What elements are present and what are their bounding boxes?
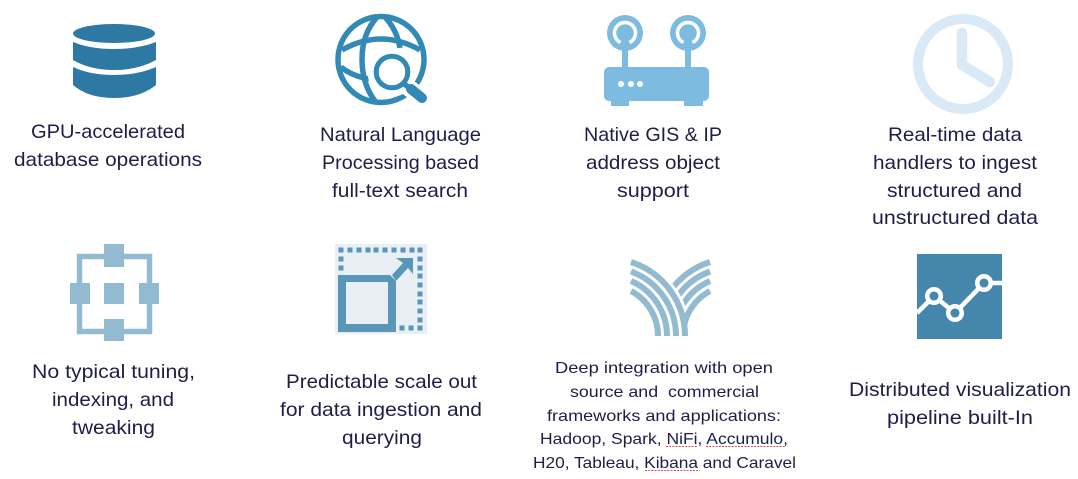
icon: database [73, 24, 156, 98]
text: Natural Language Processing based full-text search: Natural Language [320, 124, 481, 146]
text: Deep integration: Deep integration with open [555, 360, 773, 377]
text: Distributed visualization pipeline built-In [849, 379, 1071, 429]
text: Native GIS & IP address object support: support [617, 180, 690, 202]
panel: scale out [280, 244, 482, 449]
spell-check squiggles [645, 446, 786, 470]
text: Natural Language Processing based full-text search [320, 124, 481, 202]
text: No typical tuning, indexing, and tweaking: tweaking [72, 417, 155, 439]
icon: node network [70, 244, 159, 341]
text: Predictable scale out [280, 371, 482, 449]
text: Deep integration: source and commercial [570, 384, 759, 401]
text: Real-time data handlers: handlers to ingest [873, 152, 1038, 174]
icon: clock [918, 19, 1008, 109]
panel: real-time data [872, 19, 1038, 229]
text: Deep integration: Hadoop, Spark, NiFi, Accumulo, [540, 431, 788, 448]
panel: visualization [849, 254, 1071, 429]
text: Real-time data handlers: Real-time data [888, 124, 1022, 146]
text: Natural Language Processing based full-text search: full-text search [332, 180, 468, 202]
text: Real-time data handlers: unstructured data [872, 207, 1038, 229]
icon: converging arcs [631, 262, 710, 336]
panel: full-text search [320, 16, 481, 202]
text: No typical tuning, indexing, and tweaking: No typical tuning, [32, 361, 195, 383]
text: Predictable scale out: querying [342, 427, 422, 449]
text: Native GIS & IP address object support: Native GIS & IP [584, 124, 722, 146]
icon: scale out square [335, 244, 427, 334]
text: Deep integration: frameworks and applications: [547, 408, 781, 425]
text: Real-time data handlers [872, 124, 1038, 229]
text: Distributed visualization pipeline built-In: Distributed visualization [849, 379, 1071, 401]
text: Distributed visualization pipeline built-In: pipeline built-In [887, 407, 1033, 429]
icon: line chart [917, 254, 1002, 339]
text: GPU-accelerated database operations: database operations [14, 149, 202, 171]
text: Native GIS & IP address object support: address object [586, 152, 721, 174]
icon: router [604, 15, 709, 106]
text: Deep integration [533, 360, 796, 472]
text: Real-time data handlers: structured and [887, 180, 1022, 202]
text: Deep integration: H20, Tableau, Kibana and Caravel [533, 455, 796, 472]
text: No typical tuning, indexing, and tweaking: indexing, and [52, 389, 174, 411]
text: Predictable scale out: Predictable scale out [286, 371, 478, 393]
text: Predictable scale out: for data ingestion and [280, 399, 482, 421]
panel: no tuning [32, 244, 195, 439]
text: Native GIS & IP address object support [584, 124, 722, 202]
text: GPU-accelerated database operations [14, 121, 202, 171]
text: Natural Language Processing based full-text search: Processing based [322, 152, 479, 174]
text: GPU-accelerated database operations: GPU-accelerated [31, 121, 185, 143]
panel: GPU database [14, 24, 202, 171]
panel: integrations [533, 262, 796, 472]
panel: GIS and IP support [584, 15, 722, 202]
icon: globe with magnifier [338, 16, 424, 102]
text: No typical tuning, indexing, and tweaking [32, 361, 195, 439]
